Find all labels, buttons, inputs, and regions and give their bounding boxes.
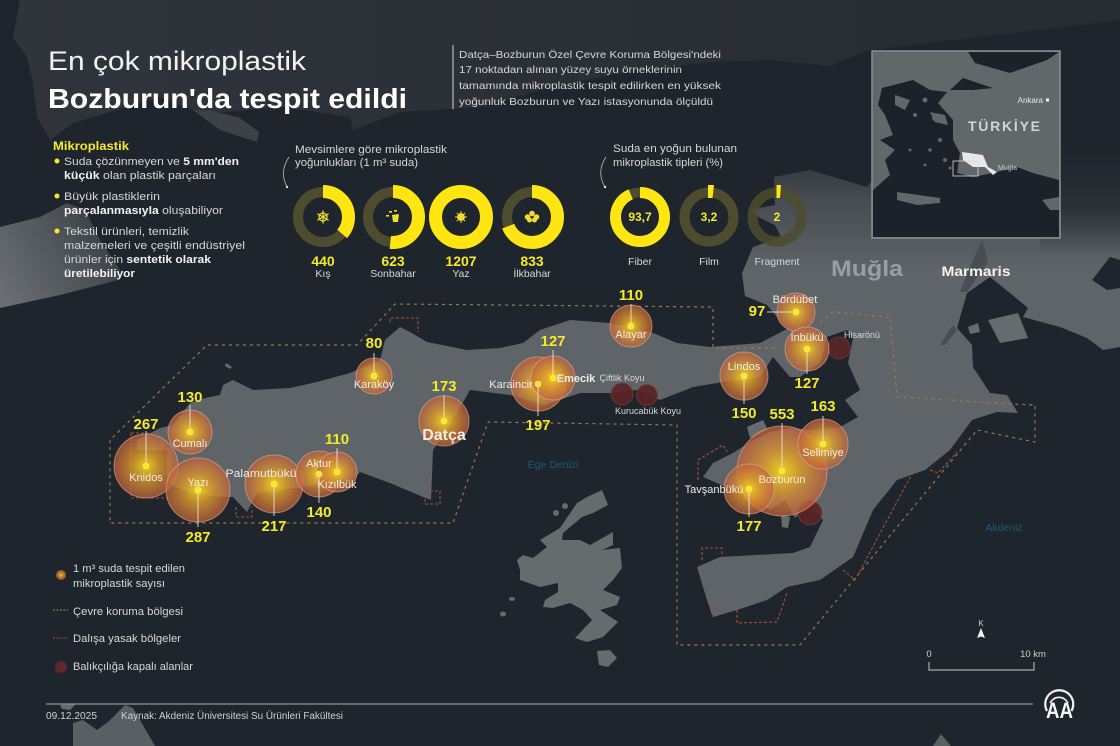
- legend: microplastic count: [56, 563, 185, 590]
- icon: snowflake: [317, 210, 329, 224]
- station values: 127: [540, 333, 566, 350]
- donut: Yaz: [436, 192, 486, 280]
- inset locator map: [872, 51, 1060, 238]
- station names: Bördübet: [773, 294, 817, 306]
- station names: Aktur: [306, 458, 332, 470]
- donut: İlkbahar: İlkbahar: [513, 267, 551, 280]
- title: En çok mikroplastik: [48, 46, 307, 76]
- station names: Karaincir: [489, 379, 533, 391]
- heading: seasonal densities: [283, 144, 448, 188]
- panel: Mikroplastik definition: üretilebiliyor: [64, 268, 136, 280]
- place labels: Muğla: [831, 256, 904, 281]
- footer: [46, 704, 1033, 722]
- station values: 140: [306, 504, 332, 521]
- heading: seasonal densities: yoğunlukları (1 m³ suda): [295, 157, 418, 169]
- donut: Fiber: Fiber: [628, 256, 652, 268]
- donut: Sonbahar: [368, 192, 418, 280]
- legend: microplastic count: 1 m³ suda tespit edilen: [73, 563, 185, 575]
- donut: Yaz: 1207: [445, 253, 477, 269]
- station names: Kızılbük: [317, 479, 357, 491]
- donut: Sonbahar: 623: [381, 253, 405, 269]
- scale bar: 0: [926, 649, 932, 660]
- station names: [129, 294, 844, 496]
- scale bar: 10 km: [1020, 649, 1046, 660]
- donut: Kış: Kış: [315, 268, 331, 280]
- station dots: [143, 309, 826, 493]
- footer: Kaynak: Akdeniz Üniversitesi Su Ürünleri Fakültesi: [121, 710, 343, 722]
- map: faded peninsula: [193, 110, 259, 142]
- map: land fade east of inset: [1040, 135, 1120, 255]
- donut: Sonbahar: Sonbahar: [370, 268, 416, 280]
- sea labels: Akdeniz: [985, 522, 1023, 534]
- place labels: [599, 256, 1011, 416]
- panel: Mikroplastik definition: Büyük plastiklerin: [64, 191, 160, 203]
- diving prohibited zones: [131, 318, 957, 623]
- station values: 150: [731, 405, 757, 422]
- map: faded northern land: [13, 0, 1120, 140]
- heading: microplastic types: mikroplastik tipleri (%): [613, 157, 723, 169]
- station values: 177: [736, 518, 762, 535]
- station values: 217: [261, 518, 287, 535]
- icon: autumn leaf: [386, 210, 399, 222]
- donut: Kış: 440: [311, 253, 335, 269]
- map: Datça and Bozburun peninsulas with mainland: [137, 140, 1120, 617]
- donut: Kış: [298, 192, 348, 280]
- map: bottom right land tip: [933, 734, 951, 746]
- panel: Mikroplastik definition: [53, 139, 245, 280]
- intro text block: [453, 45, 722, 109]
- sea labels: [528, 459, 1023, 534]
- donut: Film: 3,2: [701, 210, 718, 224]
- station names: Yazı: [187, 477, 209, 489]
- panel: Mikroplastik definition: malzemeleri ve çeşitli endüstriyel: [64, 240, 245, 252]
- fishing closed areas: [611, 337, 850, 525]
- station names: Selimiye: [802, 447, 844, 459]
- map: southern land fragment: [73, 705, 155, 746]
- heading: seasonal densities: Mevsimlere göre mikroplastik: [295, 144, 448, 156]
- station values: 173: [431, 378, 457, 395]
- donut: Yaz: Yaz: [452, 268, 470, 280]
- microplastic spots: [114, 293, 848, 522]
- intro text block: tamamında mikroplastik tespit edilirken en yüksek: [459, 80, 722, 92]
- donut: Fragment: Fragment: [755, 256, 800, 268]
- logo: AA: AA: [1046, 698, 1073, 723]
- footer: 09.12.2025: [46, 711, 97, 722]
- station values: 267: [133, 416, 159, 433]
- inset locator map: Muğla: [998, 165, 1017, 172]
- legend: protected zone: Çevre koruma bölgesi: [73, 606, 183, 618]
- title: [48, 46, 407, 114]
- donut: Fragment: 2: [774, 210, 781, 224]
- map: eastern inlet and Marmaris islet: [940, 240, 1120, 345]
- donut: Fiber: [616, 192, 664, 268]
- donut: Fragment: [752, 185, 802, 268]
- station names: Karaköy: [354, 379, 395, 391]
- panel: Mikroplastik definition: parçalanmasıyla oluşabiliyor: [64, 205, 223, 217]
- station names: İnbükü: [790, 331, 824, 344]
- heading: microplastic types: Suda en yoğun bulunan: [613, 143, 737, 155]
- intro text block: yoğunluk Bozburun ve Yazı istasyonunda ölçüldü: [459, 96, 713, 108]
- title: Bozburun'da tespit edildi: [48, 83, 407, 114]
- place labels: Marmaris: [942, 263, 1011, 279]
- map: Symi island: [500, 490, 622, 667]
- legend: microplastic count: mikroplastik sayısı: [73, 578, 165, 590]
- legend: diving prohibited: Dalışa yasak bölgeler: [73, 633, 181, 645]
- inset locator map: TÜRKİYE: [968, 118, 1040, 134]
- station names: Alayar: [615, 329, 647, 341]
- station names: Cumalı: [173, 438, 207, 450]
- panel: Mikroplastik definition: Mikroplastik: [53, 139, 129, 153]
- place labels: Hisarönü: [844, 330, 880, 340]
- icon: spring flower: [525, 211, 539, 222]
- logo: AA: [1045, 690, 1073, 723]
- inset: Marmara: [950, 78, 993, 90]
- map: small islets: [60, 363, 790, 710]
- donut: İlkbahar: 833: [520, 253, 544, 269]
- station values: 80: [366, 335, 382, 352]
- station values: 127: [794, 375, 820, 392]
- station leader lines: [146, 304, 823, 527]
- donut: Fiber: 93,7: [628, 210, 652, 224]
- station values: 287: [185, 529, 211, 546]
- station names: Bozburun: [758, 474, 806, 486]
- panel: Mikroplastik definition: Suda çözünmeyen ve 5 mm'den: [64, 156, 239, 168]
- inset: study area box: [953, 161, 978, 176]
- inset locator map: Ankara: [1018, 96, 1044, 105]
- panel: Mikroplastik definition: küçük olan plastik parçaları: [64, 170, 216, 182]
- station values: 110: [325, 431, 349, 448]
- place labels: Kurucabük Koyu: [615, 406, 681, 416]
- intro text block: 17 noktadan alınan yüzey suyu örneklerinin: [459, 64, 682, 76]
- inset: Aegean and Mediterranean: [873, 80, 1059, 237]
- station values: 130: [177, 389, 203, 406]
- donut: Film: [684, 185, 734, 268]
- panel: Mikroplastik definition: ürünler için sentetik olarak: [64, 254, 212, 266]
- donut: İlkbahar: [506, 192, 558, 280]
- station values: 197: [525, 417, 551, 434]
- station names: Knidos: [129, 472, 163, 484]
- scale bar: [926, 649, 1046, 670]
- legend: [53, 563, 193, 673]
- station names: Datça: [422, 427, 466, 444]
- place labels: Çiftlik Koyu: [599, 373, 645, 383]
- map: Kos island: [0, 203, 120, 308]
- protected zone boundaries: [110, 304, 1035, 645]
- station values: [133, 287, 836, 546]
- station names: Lindos: [728, 361, 761, 373]
- station values: 553: [769, 406, 795, 423]
- panel: Mikroplastik definition: Tekstil ürünleri, temizlik: [64, 226, 190, 238]
- icon: sun: [455, 211, 467, 223]
- compass: K: [978, 619, 984, 628]
- legend: fishing closed: Balıkçılığa kapalı alanlar: [73, 661, 193, 673]
- sea labels: Ege Denizi: [528, 459, 578, 471]
- station values: 163: [810, 398, 836, 415]
- compass: [977, 619, 985, 638]
- heading: microplastic types: [601, 143, 737, 188]
- station values: 110: [619, 287, 643, 304]
- station names: Tavşanbükü: [685, 484, 743, 496]
- station names: Palamutbükü: [226, 468, 296, 480]
- intro text block: Datça–Bozburun Özel Çevre Koruma Bölgesi'ndeki: [459, 49, 721, 61]
- inset: Black Sea: [968, 52, 1059, 73]
- donut: Film: Film: [699, 256, 719, 268]
- station names: Emecik: [557, 373, 596, 385]
- inset: islands: [895, 95, 1059, 210]
- station values: 97: [749, 303, 765, 320]
- inset: Muğla province: [962, 152, 997, 175]
